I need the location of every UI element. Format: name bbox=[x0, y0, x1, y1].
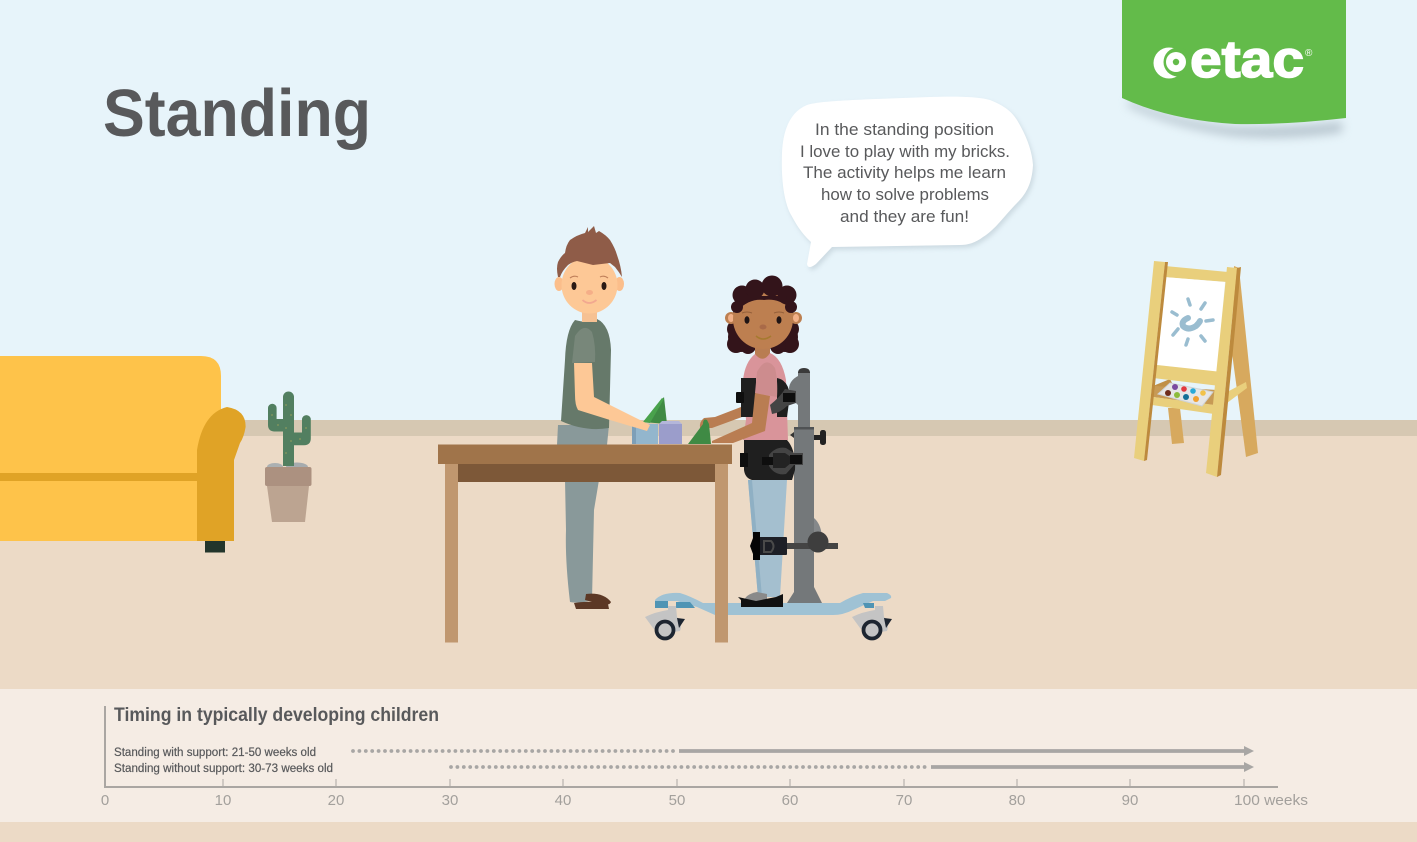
speech bubble: I love to play with my bricks. bbox=[800, 142, 1010, 161]
man legs bbox=[557, 425, 609, 603]
sky background bbox=[0, 0, 1417, 420]
timeline panel bbox=[0, 689, 1417, 822]
wall skirting band bbox=[0, 420, 1417, 436]
axis labels: 50 bbox=[669, 792, 685, 809]
man shirt bbox=[561, 319, 611, 429]
axis labels: 90 bbox=[1122, 792, 1138, 809]
painted sun bbox=[1172, 299, 1213, 345]
axis labels: 20 bbox=[328, 792, 344, 809]
girl shoes bbox=[743, 592, 767, 603]
man neck bbox=[582, 310, 597, 322]
sofa bbox=[0, 356, 246, 552]
standing frame back column bbox=[787, 368, 826, 603]
speech bubble: how to solve problems bbox=[821, 185, 989, 204]
girl top curls bbox=[731, 276, 797, 313]
timeline axis bbox=[105, 706, 1278, 787]
girl neck bbox=[755, 346, 770, 360]
table bbox=[438, 444, 732, 642]
axis labels: 100 weeks bbox=[1234, 792, 1308, 809]
floor bbox=[0, 436, 1417, 842]
axis labels: 80 bbox=[1009, 792, 1025, 809]
girl back arm bbox=[700, 407, 742, 428]
girl head bbox=[725, 312, 737, 324]
axis labels: 70 bbox=[896, 792, 912, 809]
axis labels bbox=[101, 792, 1308, 809]
paint palette bbox=[1158, 383, 1213, 406]
girl front arm bbox=[712, 393, 770, 443]
knee support bbox=[750, 532, 838, 560]
speech bubble: and they are fun! bbox=[840, 207, 969, 226]
girl legs bbox=[748, 480, 787, 597]
right caster bbox=[852, 606, 892, 638]
chest harness bbox=[736, 378, 796, 417]
girl bbox=[688, 276, 803, 597]
left caster bbox=[645, 606, 685, 638]
etac logo bbox=[1122, 0, 1346, 137]
cactus in pot bbox=[265, 392, 312, 522]
arrow: without support bbox=[451, 762, 1254, 772]
title: Standing bbox=[103, 76, 371, 151]
etac logo: etac bbox=[1190, 31, 1304, 89]
timeline heading: Timing in typically developing children bbox=[114, 705, 439, 726]
arrow: with support bbox=[353, 746, 1254, 756]
easel bbox=[1134, 261, 1258, 477]
girl hair back bbox=[727, 285, 799, 354]
man shoes bbox=[574, 594, 611, 609]
girl shirt bbox=[743, 353, 788, 440]
row label: with support: Standing with support: 21-50 weeks old bbox=[114, 747, 316, 759]
standing frame base bbox=[645, 592, 892, 638]
etac logo: ® bbox=[1305, 48, 1313, 59]
girl sleeve bbox=[755, 362, 777, 397]
man arm bbox=[574, 363, 650, 431]
man bbox=[554, 226, 624, 609]
axis labels: 30 bbox=[442, 792, 458, 809]
axis labels: 0 bbox=[101, 792, 109, 809]
man head bbox=[554, 277, 564, 291]
row label: without support: Standing without support: 30-73 weeks old bbox=[114, 763, 333, 775]
axis labels: 60 bbox=[782, 792, 798, 809]
speech bubble bbox=[782, 97, 1035, 270]
speech bubble: The activity helps me learn bbox=[803, 163, 1006, 182]
hip harness bbox=[740, 440, 803, 480]
speech bubble: In the standing position bbox=[815, 120, 994, 139]
axis labels: 10 bbox=[215, 792, 231, 809]
toy blocks bbox=[632, 397, 682, 444]
axis labels: 40 bbox=[555, 792, 571, 809]
green block in hand bbox=[688, 420, 711, 444]
